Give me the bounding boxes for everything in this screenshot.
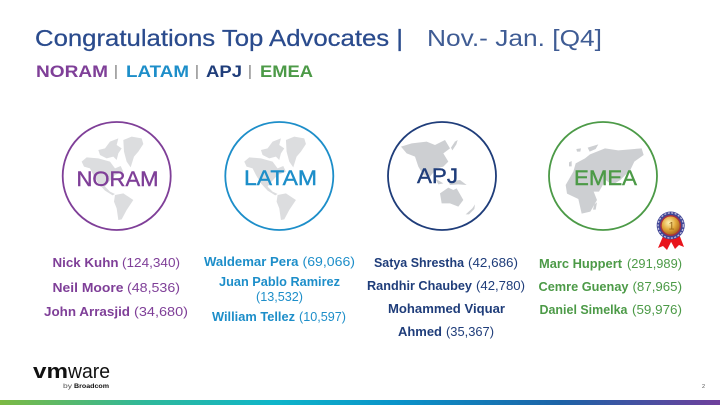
subtitle: region list: LATAM: [126, 62, 189, 81]
logo: vmware by Broadcom: Broadcom: [74, 384, 109, 390]
title: [35, 25, 602, 51]
logo: vmware by Broadcom: vm: [33, 361, 68, 383]
logo: vmware by Broadcom: by: [63, 384, 72, 390]
subtitle: region list: NORAM: [36, 62, 108, 81]
text block: EMEA advocates: Daniel Simelka: [540, 303, 629, 317]
panel: LATAM badge: LATAM: [244, 167, 317, 190]
subtitle: region list: [36, 62, 313, 81]
text block: NORAM advocates: [44, 256, 188, 319]
text block: APJ advocates: Satya Shrestha: [374, 256, 465, 270]
text block: LATAM advocates: Waldemar Pera: [204, 255, 300, 269]
subtitle: region list: |: [248, 63, 252, 80]
icon: Asia Pacific map: [401, 140, 475, 214]
panel: LATAM badge: [225, 122, 333, 230]
text block: APJ advocates: (42,780): [476, 279, 525, 293]
title: Congratulations Top Advocates |: [35, 25, 403, 51]
subtitle: region list: APJ: [206, 62, 242, 81]
gradient footer bar: [0, 400, 720, 405]
logo: vmware by Broadcom: ware: [67, 361, 110, 383]
text block: LATAM advocates: (10,597): [299, 310, 346, 324]
text block: APJ advocates: Mohammed Viquar: [388, 302, 505, 316]
icon: award ribbon medal: 1: [668, 220, 675, 232]
subtitle: region list: |: [195, 63, 199, 80]
panel: NORAM badge: NORAM: [76, 168, 158, 191]
icon: Europe Middle East Africa map: [566, 144, 644, 214]
subtitle: region list: EMEA: [260, 62, 313, 81]
text block: APJ advocates: Ahmed: [398, 325, 442, 339]
panel: NORAM badge: [63, 122, 171, 230]
text block: APJ advocates: (42,686): [468, 256, 518, 270]
panel: APJ badge: APJ: [417, 165, 458, 188]
text block: APJ advocates: Randhir Chaubey: [367, 279, 472, 293]
text block: LATAM advocates: (69,066): [302, 255, 355, 269]
text block: NORAM advocates: (34,680): [134, 305, 188, 319]
panel: APJ badge: [388, 122, 496, 230]
text block: EMEA advocates: (291,989): [627, 257, 682, 271]
icon: award ribbon medal: [657, 212, 685, 250]
panel: EMEA badge: EMEA: [574, 167, 637, 190]
title: Nov.- Jan. [Q4]: [427, 25, 602, 51]
page number: 2: [702, 384, 705, 390]
text block: APJ advocates: [367, 256, 525, 339]
text block: EMEA advocates: [538, 257, 682, 317]
logo: vmware by Broadcom: [33, 361, 110, 390]
text block: APJ advocates: (35,367): [446, 325, 494, 339]
text block: EMEA advocates: (87,965): [632, 280, 682, 294]
text block: LATAM advocates: William Tellez: [212, 310, 295, 324]
icon: Americas map: [244, 137, 306, 220]
text block: LATAM advocates: [204, 255, 355, 324]
text block: NORAM advocates: Nick Kuhn: [52, 256, 118, 270]
text block: EMEA advocates: Marc Huppert: [539, 257, 623, 271]
text block: NORAM advocates: (48,536): [127, 281, 180, 295]
text block: LATAM advocates: (13,532): [256, 290, 303, 304]
icon: Americas map: [82, 137, 143, 220]
text block: EMEA advocates: (59,976): [632, 303, 682, 317]
text block: NORAM advocates: John Arrasjid: [44, 305, 130, 319]
text block: NORAM advocates: (124,340): [122, 256, 180, 270]
subtitle: region list: |: [114, 63, 118, 80]
panel: EMEA badge: [549, 122, 657, 230]
text block: EMEA advocates: Cemre Guenay: [538, 280, 629, 294]
text block: LATAM advocates: Juan Pablo Ramirez: [219, 275, 340, 289]
text block: NORAM advocates: Neil Moore: [52, 281, 124, 295]
